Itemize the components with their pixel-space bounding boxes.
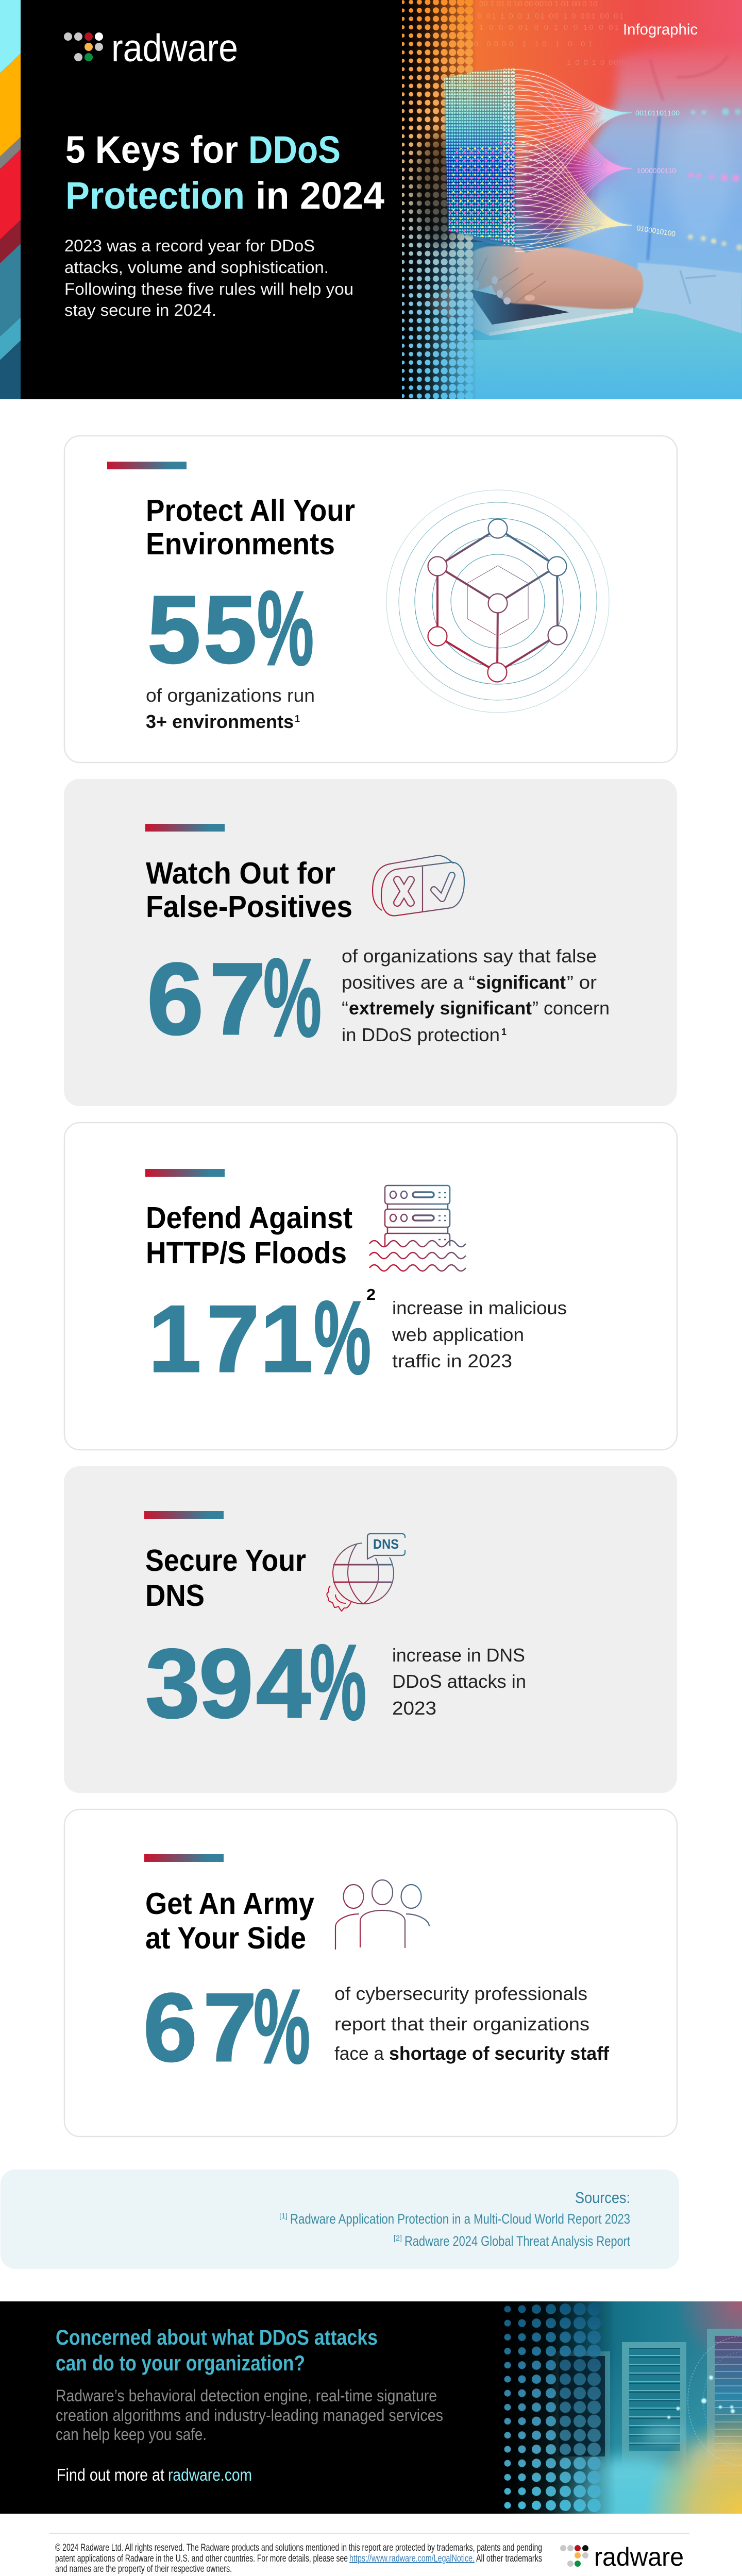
clouds — [567, 2427, 742, 2537]
statistic caption: web application — [392, 1324, 524, 1345]
statistic caption: report that their organizations — [334, 2013, 589, 2035]
statistic: 171%: 171 — [148, 1285, 313, 1392]
accent bar — [145, 824, 225, 832]
faint binary digits: 00 0 0000 1 10 1 0 01 — [453, 40, 593, 48]
heading: False-Positives — [146, 890, 352, 924]
statistic caption: traffic in 2023 — [392, 1350, 512, 1371]
statistic: 67% — [143, 1968, 310, 2086]
intro paragraph: attacks, volume and sophistication. — [64, 258, 329, 277]
title — [65, 128, 384, 217]
heading — [146, 1201, 352, 1270]
faint binary digits: 1 000 1000 000 1000 1000 000 — [438, 372, 587, 381]
heading: Watch Out for — [146, 856, 335, 890]
cta paragraph: Radware’s behavioral detection engine, real-time signature — [56, 2386, 437, 2405]
statistic caption — [392, 1297, 567, 1371]
binary streams: 00101101100 — [635, 109, 680, 117]
heading: DNS — [145, 1579, 205, 1613]
heading — [145, 1544, 306, 1613]
statistic: 171% — [148, 1279, 371, 1396]
label: Infographic: Infographic — [623, 21, 698, 38]
binary streams — [635, 109, 680, 238]
statistic: 67%: 67 — [147, 942, 266, 1056]
hero image: person typing with data streams — [397, 0, 742, 399]
statistic caption: shortage of security staff — [389, 2043, 610, 2064]
blue tint over left of hands — [453, 242, 526, 340]
cta link line — [57, 2465, 252, 2484]
statistic caption: of organizations run — [146, 685, 315, 706]
statistic caption: in DDoS protection — [342, 1024, 500, 1045]
heading — [145, 1887, 314, 1955]
heading — [146, 856, 352, 924]
title: 5 Keys for — [65, 128, 238, 171]
logo: radware white: radware — [111, 26, 238, 70]
statistic caption: “ — [342, 997, 348, 1019]
legal text — [55, 2543, 542, 2574]
logo: radware white — [64, 26, 238, 70]
network globe — [667, 2336, 742, 2465]
statistic caption: of cybersecurity professionals — [334, 1983, 587, 2004]
statistic caption: 1 — [295, 714, 300, 724]
statistic: 55% — [147, 569, 314, 687]
intro paragraph — [64, 236, 353, 319]
statistic: 67%: % — [254, 1968, 310, 2086]
statistic caption — [146, 685, 315, 732]
faint binary digits: 0 1 0000 10 001 0000 10 — [453, 350, 593, 359]
source 2: [2] — [394, 2234, 402, 2243]
legal text: © 2024 Radware Ltd. All rights reserved. The Radware products and solutions mentioned in this report are protected by trademarks, patents and pending — [55, 2543, 542, 2553]
sleeve — [635, 263, 742, 335]
statistic caption: 1 — [501, 1027, 507, 1037]
statistic caption: DDoS attacks in — [392, 1671, 526, 1692]
binary streams: 1000000110 — [637, 166, 676, 175]
heading — [146, 494, 355, 561]
binary streams: 0100010100 — [636, 224, 676, 238]
faint binary digits: 1 0 0 1 0 0000 — [567, 58, 629, 67]
title: DDoS — [248, 128, 341, 171]
faint binary digits: 1 0 0 0 01 0 0 1 0 0 10 0 01 0 0 10 — [479, 23, 654, 32]
intro paragraph: stay secure in 2024. — [64, 301, 216, 319]
panel: protect all your environments — [64, 436, 677, 762]
statistic: 67%: % — [263, 935, 322, 1060]
legal text: and names are the property of their respective owners. — [55, 2564, 232, 2574]
heading: Protect All Your — [146, 494, 355, 528]
sources heading: Sources: — [575, 2189, 630, 2207]
accent bar — [144, 1854, 224, 1862]
cta paragraph — [56, 2386, 443, 2444]
statistic caption: significant — [476, 972, 566, 993]
data stream fans — [515, 70, 632, 251]
cta paragraph: creation algorithms and industry-leading managed services — [56, 2406, 443, 2425]
statistic: 55%: % — [257, 569, 314, 687]
data matrix — [443, 67, 517, 245]
dark fade into black panel — [402, 0, 477, 399]
statistic caption: ” or — [567, 972, 597, 993]
panel: call to action — [0, 2301, 742, 2537]
accent bar — [107, 462, 187, 469]
source 1: [1] — [279, 2212, 288, 2221]
panel: defend against HTTP/S floods — [64, 1123, 677, 1450]
intro paragraph: 2023 was a record year for DDoS — [64, 236, 315, 255]
legal text: https://www.radware.com/LegalNotice. — [349, 2553, 475, 2564]
title: Protection — [65, 174, 245, 217]
cta heading: Concerned about what DDoS attacks — [56, 2325, 378, 2349]
source 1: Radware Application Protection in a Multi-Cloud World Report 2023 — [290, 2211, 630, 2227]
shirt — [562, 44, 742, 299]
halftone dots — [500, 2301, 603, 2514]
cta paragraph: can help keep you safe. — [56, 2425, 207, 2444]
cta image: server racks in clouds — [495, 2301, 742, 2537]
icon: three people — [335, 1880, 429, 1950]
icon: globe with DNS bubble and gear: DNS — [373, 1536, 399, 1552]
cta heading: can do to your organization? — [56, 2351, 305, 2375]
statistic: 394% — [145, 1623, 366, 1742]
statistic caption — [392, 1645, 526, 1719]
legal text: All other trademarks — [476, 2553, 542, 2564]
accent bar — [145, 1169, 225, 1177]
statistic: 394%: 394 — [145, 1629, 311, 1738]
icon: globe with DNS bubble and gear — [327, 1534, 405, 1611]
left colour stripe — [0, 0, 21, 399]
purple glow behind streams — [518, 144, 590, 232]
statistic caption: of organizations say that false — [342, 945, 597, 967]
heading: HTTP/S Floods — [146, 1236, 347, 1270]
source 2: Radware 2024 Global Threat Analysis Report — [404, 2233, 630, 2249]
heading: Defend Against — [146, 1201, 352, 1235]
cta link line: radware.com — [168, 2465, 252, 2484]
statistic: 55%: 55 — [147, 577, 257, 683]
statistic caption: extremely significant — [349, 997, 532, 1019]
intro paragraph: Following these five rules will help you — [64, 280, 353, 298]
statistic caption — [334, 1983, 610, 2064]
panel: get an army at your side — [64, 1809, 677, 2137]
faint binary digits — [456, 1, 654, 65]
heading: at Your Side — [145, 1921, 306, 1955]
faint binary digits: 0 00 0 10 0 0 0 — [474, 363, 587, 372]
panel: hero banner — [0, 0, 742, 399]
halftone dots — [402, 0, 473, 399]
hands — [458, 246, 643, 309]
statistic caption: face a — [334, 2043, 384, 2064]
statistic caption: increase in malicious — [392, 1297, 567, 1318]
accent bar — [144, 1511, 224, 1519]
cta link line: Find out more at — [57, 2465, 164, 2484]
panel: secure your DNS — [64, 1466, 677, 1793]
statistic: 394%: % — [310, 1623, 366, 1742]
table — [439, 308, 742, 391]
faint binary digits: 0 0 01 1 0 0 1 01 00 1 0 001 00 01 — [469, 12, 623, 21]
statistic caption: ” concern — [532, 997, 610, 1019]
footer — [49, 2533, 689, 2574]
fade to black — [495, 2301, 618, 2514]
footnote marker: 2 — [366, 1285, 376, 1303]
heading: Environments — [146, 527, 335, 561]
statistic caption: increase in DNS — [392, 1645, 525, 1666]
logo: radware black: radware — [594, 2543, 684, 2571]
statistic caption: 2023 — [392, 1698, 436, 1719]
statistic: 67% — [147, 935, 322, 1060]
legal text: patent applications of Radware in the U.S. and other countries. For more details, please see — [55, 2553, 348, 2564]
statistic caption: positives are a “ — [342, 972, 475, 993]
icon: false positive toggle with cross and check — [373, 856, 464, 916]
panel: sources — [1, 2170, 679, 2269]
icon: hexagon network with concentric rings — [386, 490, 609, 713]
faint binary digits: 1 00100 10 00 01 00100 0 1 0 — [469, 384, 639, 393]
statistic: 67%: 67 — [143, 1973, 257, 2081]
cta heading — [56, 2325, 378, 2375]
icon: server rack in flood waves — [369, 1185, 466, 1271]
heading: Get An Army — [145, 1887, 314, 1921]
statistic caption: 3+ environments — [146, 711, 294, 732]
statistic: 171%: % — [314, 1279, 371, 1396]
laptop — [440, 233, 503, 275]
statistic caption — [342, 945, 610, 1045]
racks — [551, 2351, 610, 2465]
panel: watch out for false-positives — [64, 779, 677, 1106]
title: in 2024 — [256, 174, 384, 217]
heading: Secure Your — [145, 1544, 306, 1578]
